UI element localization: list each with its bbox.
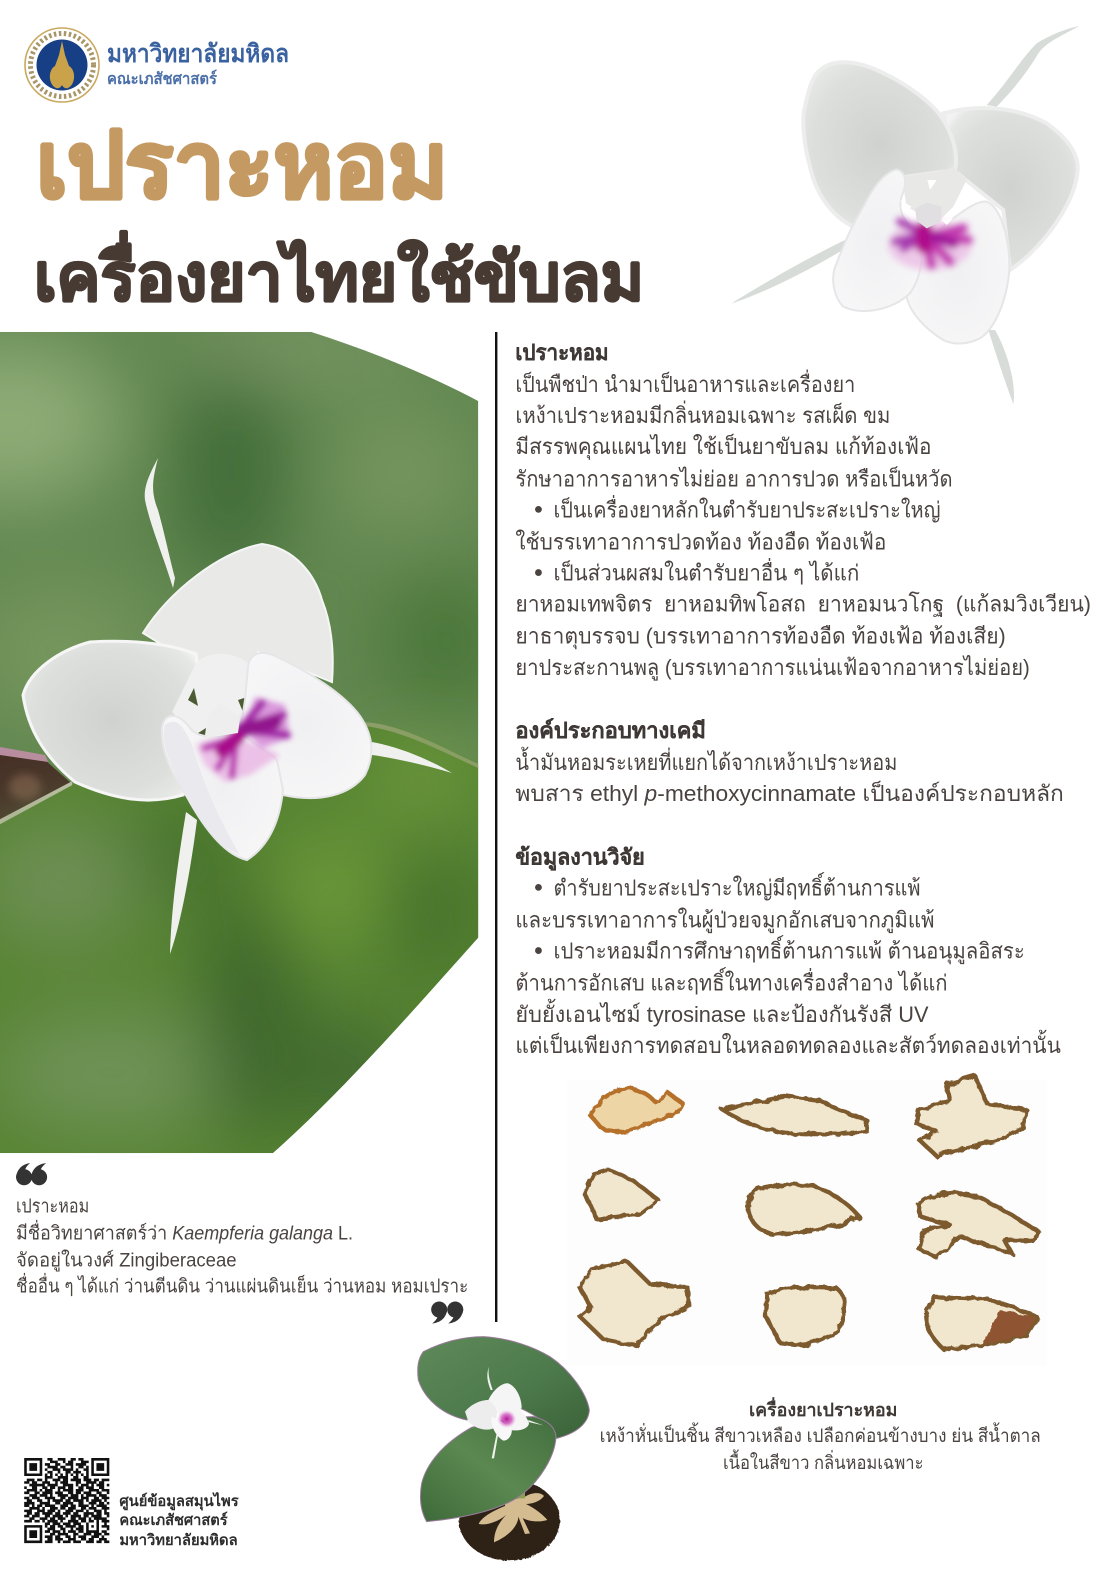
text: about the plant [515,340,1091,681]
text: about the plant: เป็นส่วนผสมในตำรับยาอื่น ๆ ได้แก่ [553,558,859,586]
footer text: ศูนย์ข้อมูลสมุนไพร [119,1491,240,1511]
text: about the plant: ยาธาตุบรรจบ (บรรเทาอาการท้องอืด ท้องเฟ้อ ท้องเสีย) [515,624,1006,650]
illustration: whole plant with rhizome [418,1337,589,1561]
opening quote mark [16,1163,47,1185]
footer text [119,1491,240,1549]
text: chemical constituents: น้ำมันหอมระเหยที่แยกได้จากเหง้าเปราะหอม [515,746,897,775]
lower petal [162,716,283,860]
spurs [145,458,452,954]
text: about the plant: เหง้าเปราะหอมมีกลิ่นหอมเฉพาะ รสเผ็ด ขม [515,400,890,428]
pink leaf edge and soil [0,754,72,822]
slice 1 [590,1088,683,1132]
photo: leaf background [0,326,506,1154]
logo: Mahidol University [25,28,289,102]
column [172,654,250,735]
quote block [16,1163,468,1324]
quote block: ชื่ออื่น ๆ ได้แก่ ว่านตีนดิน ว่านแผ่นดินเย็น ว่านหอม หอมเปราะ [16,1272,468,1297]
closing quote mark [431,1302,463,1324]
lower leaf [420,1417,556,1522]
lower right petal [907,202,1009,344]
rhizomes [479,1493,547,1542]
slice 9 [926,1297,1037,1349]
lower left petal [833,169,922,311]
lower leaf [0,722,478,1153]
text: about the plant: ยาหอมเทพจิตร ยาหอมทิพโอสถ ยาหอมนวโกฐ (แก้ลมวิงเวียน) [515,592,1091,618]
subtitle: เครื่องยาไทยใช้ขับลม [34,230,644,314]
quote block: จัดอยู่ในวงศ์ Zingiberaceae [16,1248,237,1271]
photo: white flower top right [732,26,1079,404]
text: research data: ยับยั้งเอนไซม์ tyrosinase และป้องกันรังสี UV [515,998,929,1027]
small flower [465,1367,543,1458]
caption: dried herb: เหง้าหั่นเป็นชิ้น สีขาวเหลือง เปลือกค่อนข้างบาง ย่น สีน้ำตาล [600,1422,1041,1446]
text: chemical constituents [515,718,1064,806]
text: research data [515,844,1061,1058]
text: research data: และบรรเทาอาการในผู้ป่วยจมูกอักเสบจากภูมิแพ้ [515,907,935,933]
faculty name: คณะเภสัชศาสตร์ [107,69,217,88]
brown skin patch [982,1310,1035,1344]
text: about the plant: เป็นพืชป่า นำมาเป็นอาหารและเครื่องยา [515,369,855,397]
pink throat [888,220,972,270]
text: research data: แต่เป็นเพียงการทดสอบในหลอดทดลองและสัตว์ทดลองเท่านั้น [515,1029,1061,1058]
slice 6 [917,1193,1039,1257]
emblem [25,28,99,102]
soil [459,1479,560,1561]
photo: flower on green leaf [23,458,452,954]
right petal [240,653,371,798]
text: about the plant: ยาประสะกานพลู (บรรเทาอาการแน่นเฟ้อจากอาหารไม่ย่อย) [515,655,1030,681]
text: chemical constituents: พบสาร ethyl p-methoxycinnamate เป็นองค์ประกอบหลัก [515,779,1064,806]
column [902,167,967,223]
right petal [943,108,1078,270]
left petal [23,641,200,800]
spurs [732,26,1079,404]
slice 2 [722,1096,867,1134]
quote block: มีชื่อวิทยาศาสตร์ว่า Kaempferia galanga L. [16,1219,353,1244]
slice 5 [748,1185,859,1234]
university name: มหาวิทยาลัยมหิดล [107,40,289,68]
heading: ข้อมูลงานวิจัย [515,844,645,871]
slice 3 [916,1076,1027,1156]
text: research data: ตำรับยาประสะเปราะใหญ่มีฤทธิ์ต้านการแพ้ [553,872,920,900]
caption: dried herb [600,1397,1041,1473]
heading: เปราะหอม [515,340,609,365]
lip centre [206,703,240,738]
text: research data: เปราะหอมมีการศึกษาฤทธิ์ต้านการแพ้ ต้านอนุมูลอิสระ [553,936,1025,965]
slice 7 [579,1261,689,1346]
footer text: มหาวิทยาลัยมหิดล [119,1531,238,1549]
text: about the plant: มีสรรพคุณแผนไทย ใช้เป็นยาขับลม แก้ท้องเฟ้อ [515,432,932,460]
left petal [803,62,956,227]
caption: dried herb: เครื่องยาเปราะหอม [749,1397,897,1420]
quote block: เปราะหอม [16,1196,89,1217]
QR code [23,1457,111,1544]
upper leaf [418,1337,589,1438]
slice 4 [584,1169,658,1219]
text: research data: ต้านการอักเสบ และฤทธิ์ในทางเครื่องสำอาง ได้แก่ [515,968,948,996]
heading: องค์ประกอบทางเคมี [515,718,706,743]
slice 8 [766,1288,844,1346]
pink throat [196,697,290,782]
top petal [143,544,333,730]
footer text: คณะเภสัชศาสตร์ [119,1511,228,1529]
lip centre [915,203,942,228]
text: about the plant: เป็นเครื่องยาหลักในตำรับยาประสะเปราะใหญ่ [553,494,941,522]
divider line [495,332,497,1322]
caption: dried herb: เนื้อในสีขาว กลิ่นหอมเฉพาะ [723,1449,923,1473]
text: about the plant: รักษาอาการอาหารไม่ย่อย อาการปวด หรือเป็นหวัด [515,464,953,491]
upper leaf shading [0,326,506,722]
text: about the plant: ใช้บรรเทาอาการปวดท้อง ท้องอืด ท้องเฟ้อ [515,529,886,554]
photo: dried rhizome slices [567,1076,1047,1365]
title: เปราะหอม [36,115,448,217]
stem [513,1490,525,1498]
